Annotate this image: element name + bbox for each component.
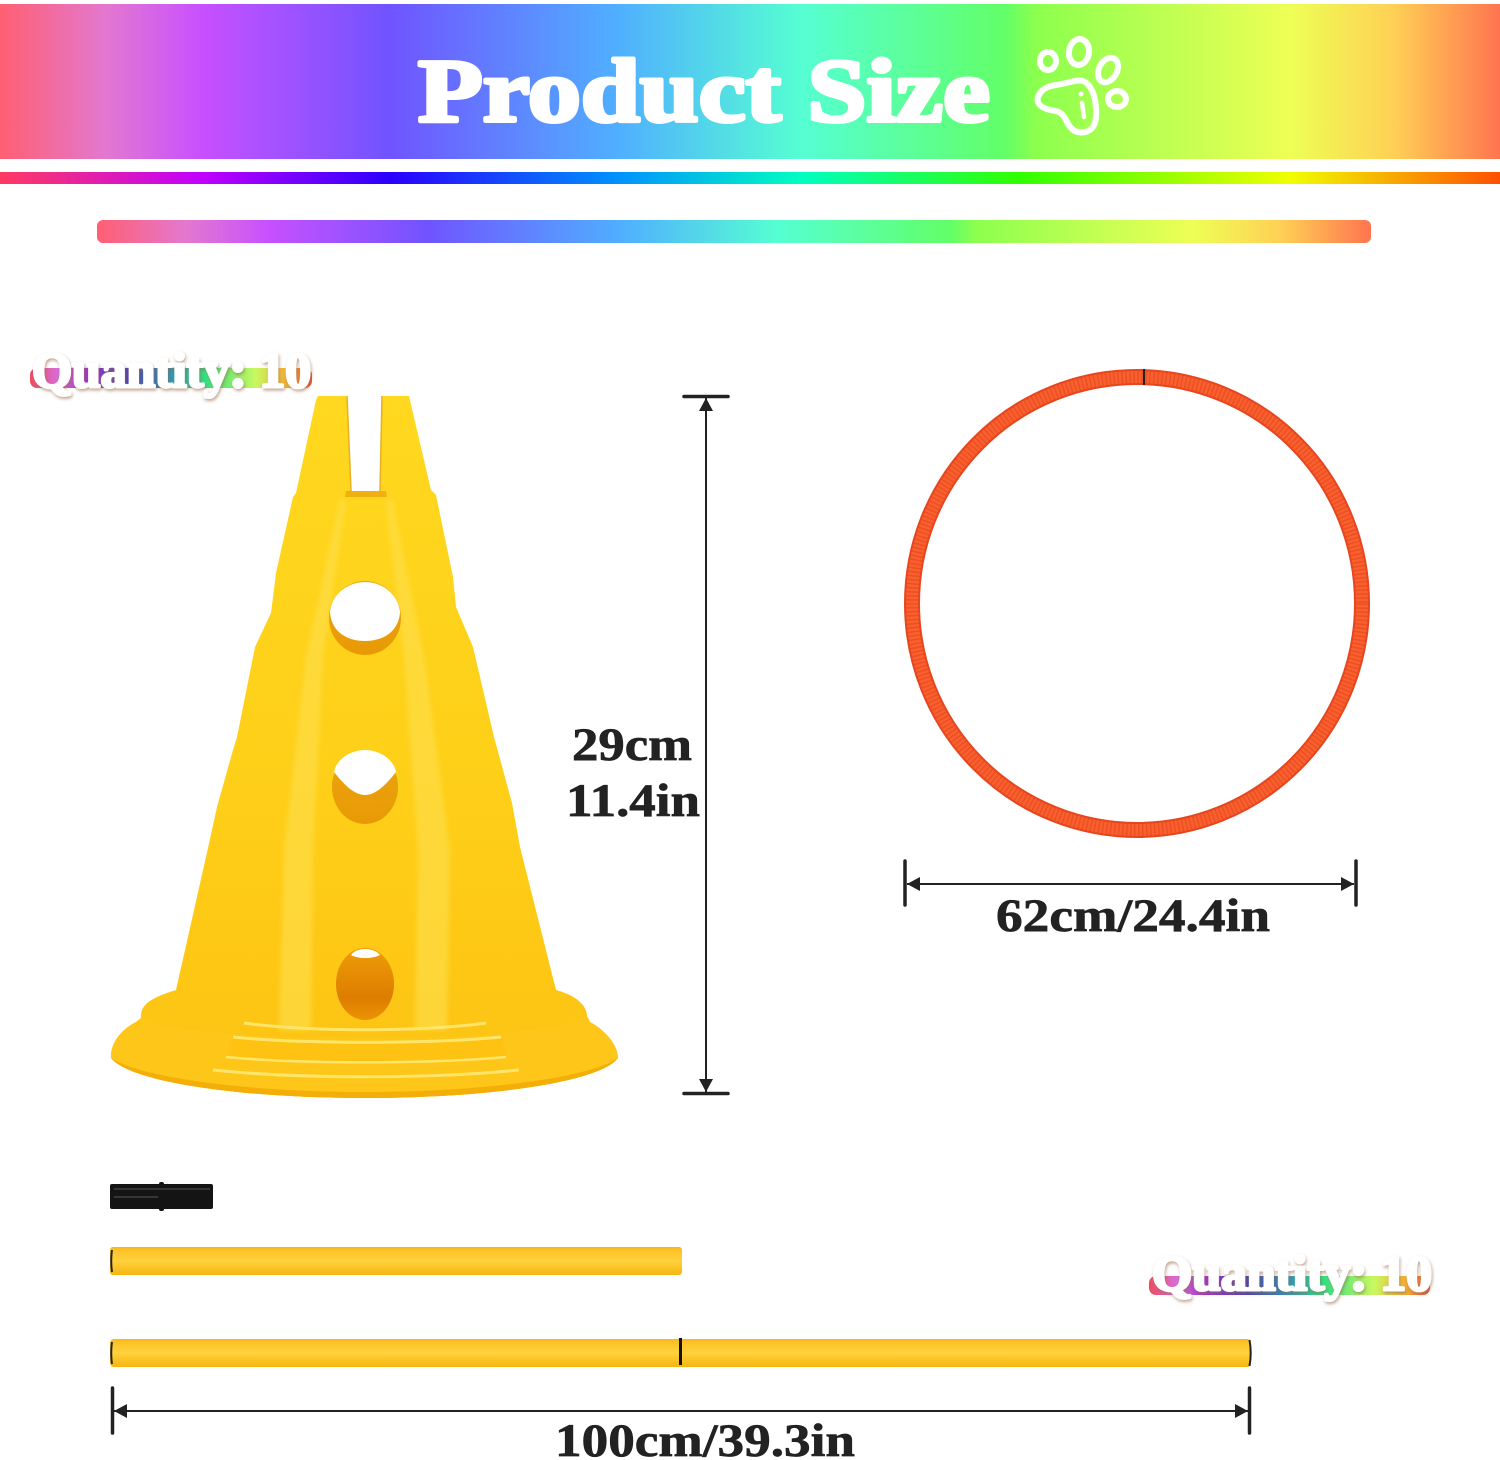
cone hole: bottom	[336, 948, 394, 1020]
rainbow divider bar	[97, 220, 1371, 243]
thin rainbow bar	[0, 172, 1500, 184]
black connector	[110, 1182, 213, 1211]
hoop width label: 62cm/24.4in	[996, 890, 1270, 942]
icon: paw print	[1038, 38, 1126, 132]
title: Product Size	[418, 42, 990, 141]
hoop width dimension arrow	[905, 861, 1356, 905]
height label: 29cm	[572, 719, 692, 771]
height label: 11.4in	[566, 775, 700, 827]
quantity label: rods: Quantity: 10	[1152, 1245, 1432, 1301]
orange hoop	[912, 369, 1362, 830]
short yellow rod	[110, 1247, 682, 1275]
height label	[566, 719, 700, 827]
cone hole: top	[329, 581, 401, 655]
height dimension arrow	[684, 396, 728, 1094]
header banner	[0, 4, 1500, 159]
long yellow rod	[110, 1338, 1251, 1367]
cone base ring	[111, 1016, 618, 1098]
yellow cone	[111, 396, 618, 1098]
cone facet highlights	[279, 500, 450, 1030]
rod length dimension arrow	[112, 1388, 1250, 1433]
cone hole: middle	[332, 750, 398, 824]
quantity label: cone: Quantity: 10	[32, 342, 311, 398]
